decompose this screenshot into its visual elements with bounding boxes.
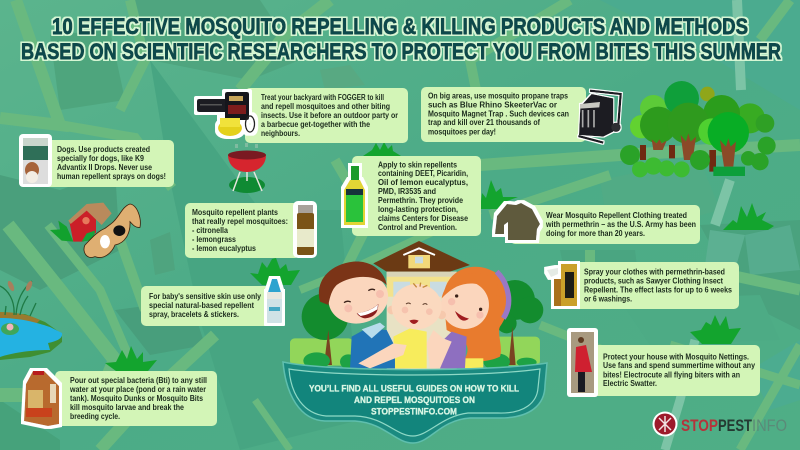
logo: StopPest.Info: INFO [752, 417, 787, 435]
banner text: YOU’LL FIND ALL USEFUL GUIDES ON HOW TO KILL [309, 384, 519, 394]
bacteria text: tank). Mosquito Dunks or Mosquito Bits [70, 394, 204, 403]
bacteria text: water at your place (pond or a rain water [69, 385, 206, 394]
repellent plants text: - lemon eucalyptus [192, 244, 257, 253]
nettings text: Electric Swatter. [603, 379, 657, 388]
grass: above baby panel [250, 258, 300, 285]
panel: skin repellents [352, 156, 481, 236]
baby skin text: spray, bracelets & stickers. [149, 310, 239, 319]
panel: clothes spray [570, 262, 739, 309]
propane text: trap and kill over 21 thousands of [428, 118, 540, 127]
clothes spray text: Repellent. The effect lasts for up to 6 weeks [584, 286, 733, 294]
logo: StopPest.Info: STOP [681, 417, 718, 435]
clothing text: doing for more than 20 years. [546, 229, 645, 238]
baby [387, 283, 446, 368]
clothes spray text: Spray your clothes with permethrin-based [584, 268, 725, 276]
grass: far right [723, 203, 774, 230]
man [319, 262, 407, 368]
skin repellent text: containing DEET, Picaridin, [378, 169, 468, 178]
title [21, 14, 781, 64]
propane text: On big areas, use mosquito propane traps [428, 92, 569, 100]
grass: lower right [690, 315, 741, 344]
icon: pond with cattails [0, 280, 62, 360]
repellent plants text: - lemongrass [192, 235, 237, 244]
propane text: Mosquito Magnet Trap . Such devices can [428, 110, 569, 118]
fogger text: Treat your backyard with FOGGER to kill [261, 93, 384, 102]
baby skin text [149, 292, 262, 319]
icon: fogger machine [197, 92, 254, 136]
bacteria text [69, 376, 207, 421]
logo: StopPest.Info: PEST [718, 417, 752, 435]
panel: dogs [40, 140, 174, 187]
icon: propane mosquito trap [578, 91, 621, 143]
clothes spray text: or 6 washings. [584, 294, 632, 304]
fogger text: a barbecue get-together with the [261, 120, 371, 129]
nettings text: bites! Electrocute all flying biters with an [603, 370, 740, 380]
clothes spray text [584, 268, 733, 304]
baby skin text: special natural-based repellent [149, 301, 254, 310]
dogs text [57, 145, 166, 181]
clothing text: Wear Mosquito Repellent Clothing treated [546, 211, 687, 220]
logo: StopPest.Info [652, 412, 787, 436]
skin repellent text: long-lasting protection, [378, 205, 458, 214]
dogs text: human repellent sprays on dogs! [57, 172, 166, 181]
propane text: mosquitoes per day! [428, 128, 496, 136]
fogger text: neighbours. [261, 129, 300, 138]
skin repellent text: Oil of lemon eucalyptus, [378, 178, 468, 187]
icon: essential oil bottle [293, 201, 317, 258]
grass: above bacteria panel [105, 346, 157, 371]
clothing text: with permethrin – as the U.S. Army has been [545, 220, 696, 229]
panel: bacteria dunks [55, 371, 217, 426]
illustration: family and house [290, 241, 543, 370]
panel: repellent plants [185, 203, 300, 258]
baby skin text: For baby's sensitive skin use only [149, 292, 262, 301]
nettings text: Use fans and spend summertime without any [603, 361, 756, 370]
icon: permethrin spray [547, 264, 577, 306]
panel: nettings [590, 345, 760, 396]
icon: baby repellent bottle [267, 279, 282, 323]
nettings text [603, 352, 756, 388]
skin repellent text [378, 160, 469, 232]
icon: barbecue grill [228, 145, 266, 193]
dogs text: Dogs. Use products created [57, 145, 150, 154]
icon: dog drops box [19, 134, 52, 187]
banner text: AND REPEL MOSQUITOES ON [354, 395, 475, 406]
fogger text: and repell mosquitoes and other biting [261, 102, 390, 111]
icon: army shirt [495, 203, 540, 240]
panel: repellent clothing [510, 205, 700, 244]
panel: fogger [245, 88, 408, 143]
panel: propane traps [421, 87, 586, 142]
panel: baby skin [141, 286, 271, 326]
icon: trees [620, 81, 776, 177]
banner text [309, 384, 519, 418]
fogger text [261, 93, 398, 138]
propane text: such as Blue Rhino SkeeterVac or [428, 100, 557, 110]
grass: centre right [480, 180, 518, 209]
skin repellent text: PMD, IR3535 and [378, 187, 436, 196]
icon: dog and doghouse [50, 203, 140, 258]
skin repellent text: Control and Prevention. [378, 223, 457, 232]
dogs text: Advantix II Drops. Never use [57, 163, 153, 172]
clothing text [545, 211, 696, 238]
icon: repel spray bottle [344, 166, 365, 225]
icon: netting door [567, 328, 598, 397]
repellent plants text: Mosquito repellent plants [192, 208, 279, 217]
fogger text: insects. Use it before an outdoor party or [261, 111, 398, 120]
bacteria text: breeding cycle. [70, 412, 120, 421]
skin repellent text: claims Centers for Disease [378, 214, 469, 223]
nettings text: Protect your house with Mosquito Nettings. [603, 352, 749, 362]
trees behind family [290, 280, 543, 370]
bacteria text: Pour out special bacteria (Bti) to any still [70, 376, 207, 385]
banner: guides callout [283, 362, 547, 443]
skin repellent text: Permethrin. They provide [378, 196, 464, 205]
repellent plants text: - citronella [192, 226, 229, 235]
woman [427, 267, 509, 368]
clothes spray text: products, such as Sawyer Clothing Insect [584, 276, 723, 286]
repellent plants text [192, 208, 288, 253]
propane text [428, 92, 569, 136]
dogs text: specially for dogs, like K9 [57, 154, 145, 163]
skin repellent text: Apply to skin repellents [378, 160, 458, 170]
house [373, 241, 470, 370]
grass: top centre [363, 142, 401, 156]
icon: mosquito bits jug [24, 371, 59, 426]
banner text: STOPPESTINFO.COM [371, 406, 457, 418]
bacteria text: kill mosquito larvae and break the [70, 403, 185, 412]
repellent plants text: that really repel mosquitoes: [192, 217, 288, 226]
